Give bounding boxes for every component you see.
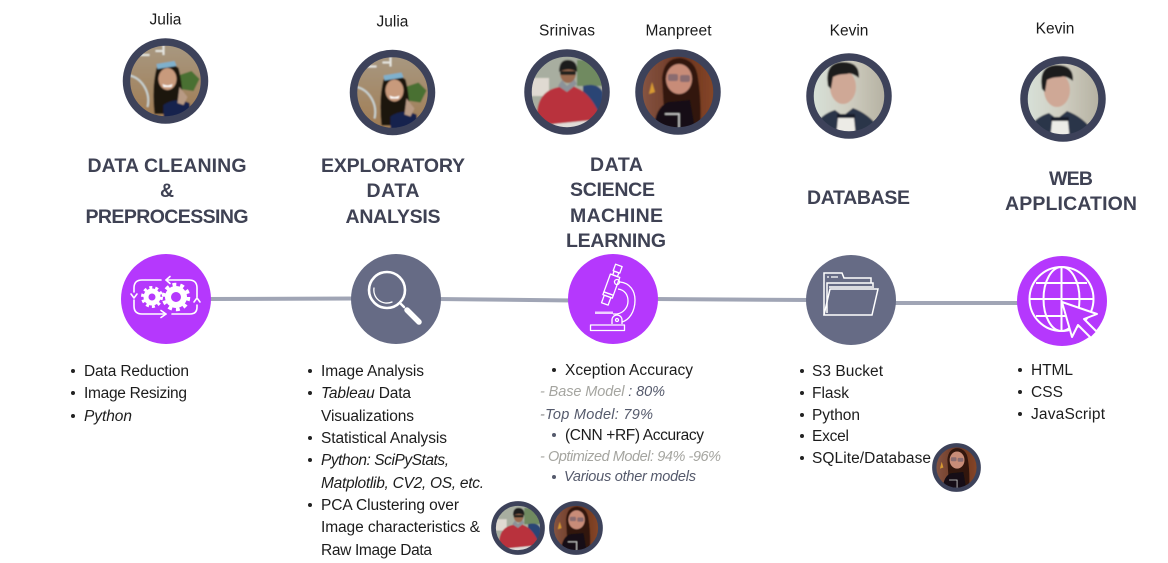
heading: exploratory data analysis <box>321 155 465 228</box>
heading: database: DATABASE <box>807 187 910 209</box>
bullet list: EDA: Python: SciPyStats, <box>321 452 449 469</box>
bullet list: database tools <box>800 363 931 467</box>
icon: globe with cursor <box>1017 256 1107 346</box>
bullet list: EDA: Tableau Data <box>321 385 411 402</box>
avatar: Manpreet small <box>549 501 603 555</box>
heading: data science machine learning: SCIENCE <box>570 179 655 201</box>
icon: magnifying glass <box>351 254 441 344</box>
heading: data science machine learning: LEARNING <box>566 230 666 252</box>
column: web application <box>1005 20 1137 423</box>
bullet list: database tools: Flask <box>812 385 849 402</box>
bullet list: model accuracy: -Top Model: 79% <box>540 407 653 423</box>
bullet list: web technologies: CSS <box>1031 384 1063 401</box>
heading: data cleaning and preprocessing: & <box>160 180 174 202</box>
avatar: Manpreet <box>635 49 721 135</box>
name: Srinivas: Srinivas <box>539 22 595 40</box>
bullet list: model accuracy <box>540 362 721 485</box>
bullet list: model accuracy: (CNN +RF) Accuracy <box>565 427 704 444</box>
bullet list: database tools: S3 Bucket <box>812 363 884 380</box>
name: Manpreet: Manpreet <box>646 22 712 40</box>
icon: folder <box>806 255 896 345</box>
avatar: Kevin <box>1020 56 1106 143</box>
avatar: Julia <box>122 38 208 124</box>
bullet list: EDA: Image characteristics & <box>321 519 481 536</box>
column: exploratory data analysis <box>308 14 603 559</box>
bullet list: preprocessing: Data Reduction <box>84 363 189 380</box>
bullet list: EDA <box>308 363 484 559</box>
name: Julia: Julia <box>150 12 182 28</box>
heading: web application: WEB <box>1049 168 1093 190</box>
avatar: Srinivas small <box>491 501 545 555</box>
bullet list: preprocessing: Python <box>84 408 132 425</box>
bullet list: model accuracy: - Base Model : 80% <box>540 384 665 400</box>
bullet list: EDA: Matplotlib, CV2, OS, etc. <box>321 475 484 492</box>
heading: data cleaning and preprocessing: PREPROCESSING <box>86 206 248 228</box>
heading: exploratory data analysis: DATA <box>366 180 420 202</box>
column: database <box>800 22 981 492</box>
name: Kevin: Kevin <box>1036 20 1074 38</box>
bullet list: preprocessing <box>71 363 189 425</box>
column: data science machine learning <box>524 22 721 485</box>
bullet list: EDA: Visualizations <box>321 408 414 425</box>
bullet list: EDA: Image Analysis <box>321 363 424 380</box>
bullet list: database tools: Excel <box>812 428 849 445</box>
heading: data cleaning and preprocessing <box>86 155 248 228</box>
bullet list: database tools: SQLite/Database <box>812 450 931 467</box>
bullet list: preprocessing: Image Resizing <box>84 385 187 402</box>
timeline connector line <box>205 298 1022 303</box>
bullet list: EDA: Statistical Analysis <box>321 430 447 447</box>
heading: web application: APPLICATION <box>1005 193 1137 215</box>
icon: gears in cycle <box>121 254 211 344</box>
bullet list: web technologies <box>1018 362 1106 423</box>
column: data cleaning and preprocessing <box>71 12 248 425</box>
heading: web application <box>1005 168 1137 215</box>
bullet list: EDA: Raw Image Data <box>321 542 432 559</box>
name: Julia: Julia <box>377 14 409 30</box>
bullet list: model accuracy: - Optimized Model: 94% -96% <box>540 449 721 465</box>
heading: data science machine learning: DATA <box>590 154 643 176</box>
heading: data cleaning and preprocessing: DATA CLEANING <box>88 155 246 177</box>
heading: exploratory data analysis: EXPLORATORY <box>321 155 465 177</box>
bullet list: web technologies: HTML <box>1031 362 1073 379</box>
avatar: Kevin <box>806 53 892 140</box>
heading: data science machine learning <box>566 154 666 252</box>
bullet list: database tools: Python <box>812 407 860 424</box>
avatar: Srinivas <box>524 49 610 135</box>
bullet list: model accuracy: Xception Accuracy <box>565 362 693 379</box>
heading: data science machine learning: MACHINE <box>570 205 663 227</box>
icon: microscope <box>568 254 658 344</box>
name: Kevin: Kevin <box>830 22 868 40</box>
avatar: Julia <box>350 50 436 136</box>
bullet list: web technologies: JavaScript <box>1031 406 1106 423</box>
avatar: Manpreet small <box>932 443 981 492</box>
bullet list: EDA: PCA Clustering over <box>321 497 459 514</box>
bullet list: model accuracy: Various other models <box>564 469 696 485</box>
heading: exploratory data analysis: ANALYSIS <box>346 206 440 228</box>
